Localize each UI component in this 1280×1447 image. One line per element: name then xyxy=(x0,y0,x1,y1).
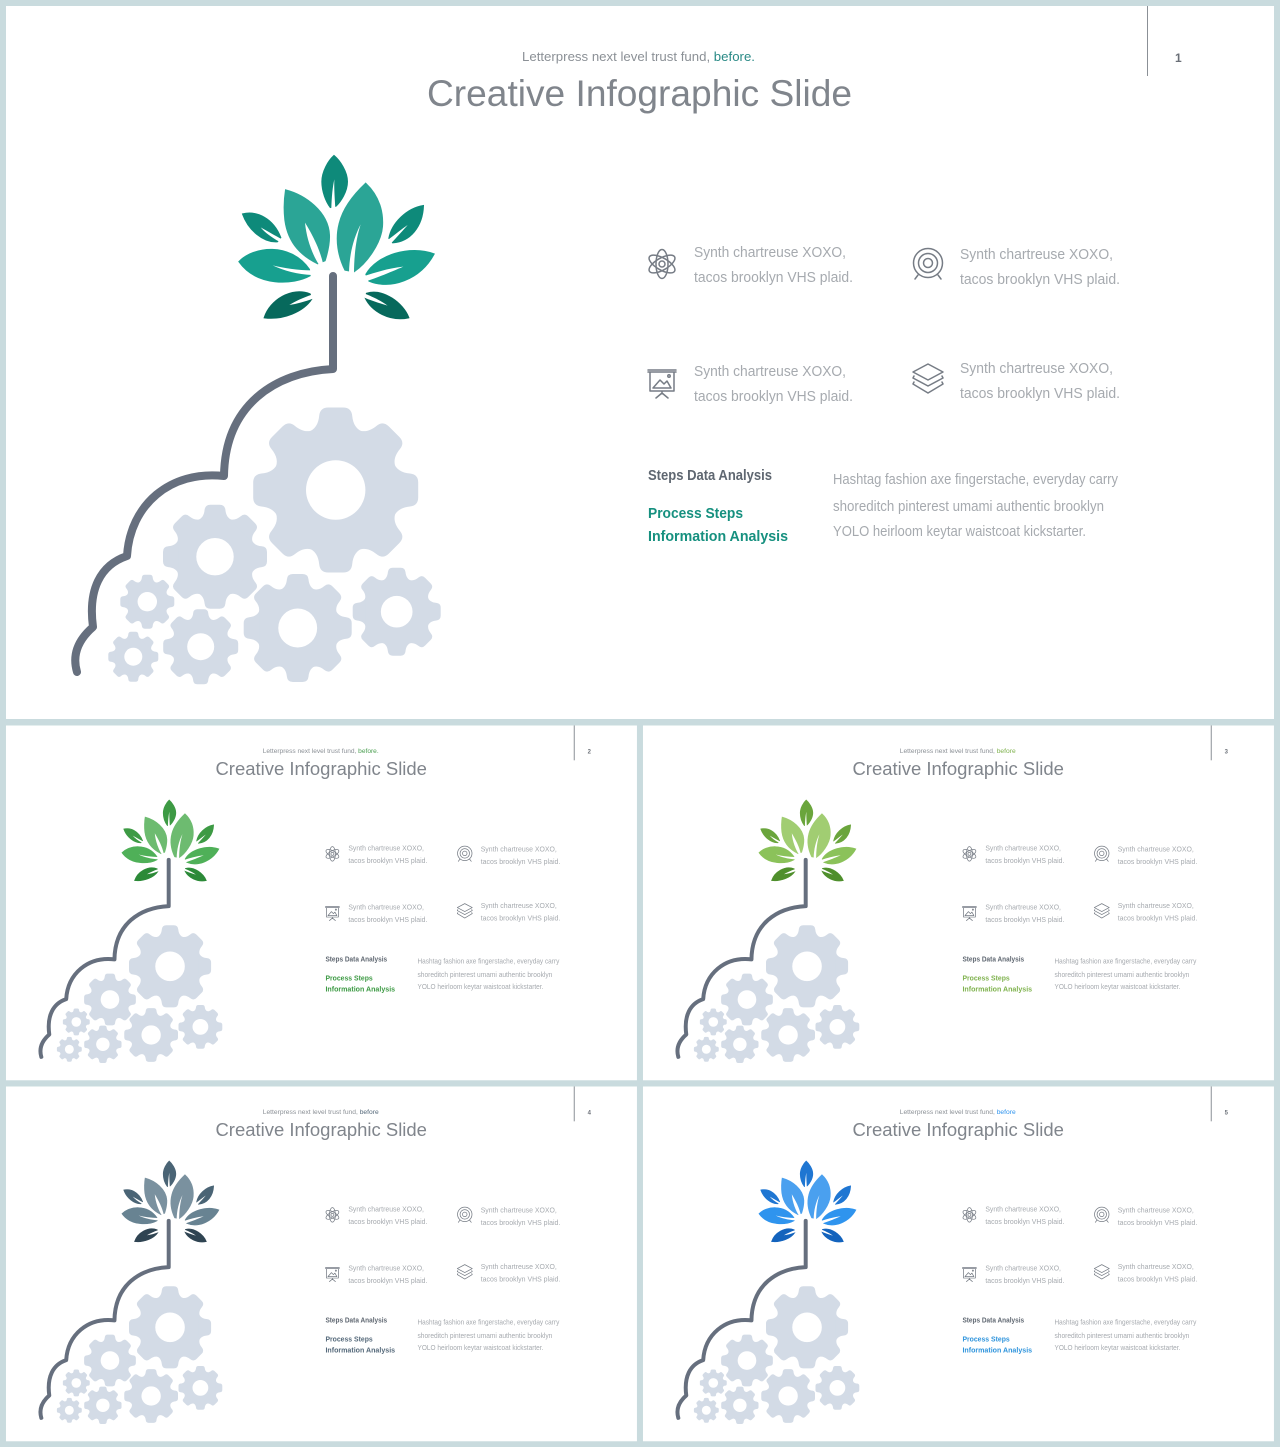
title: Creative Infographic Slide xyxy=(427,73,852,114)
feature text 4: tacos brooklyn VHS plaid. xyxy=(481,1275,560,1284)
paragraph: Hashtag fashion axe fingerstache, everyday carry xyxy=(418,1317,560,1326)
feature text 2: tacos brooklyn VHS plaid. xyxy=(481,857,560,866)
title: Creative Infographic Slide xyxy=(215,758,427,779)
feature text 3: tacos brooklyn VHS plaid. xyxy=(985,915,1064,924)
icon: atom xyxy=(325,1208,340,1222)
icon: target xyxy=(458,846,472,861)
icon: atom xyxy=(962,847,977,861)
subtitle: Letterpress next level trust fund, before xyxy=(900,1109,1016,1116)
panel: slide 1 teal xyxy=(6,6,1274,719)
heading: process steps: Process Steps xyxy=(648,505,743,522)
heading: process steps: Process Steps xyxy=(325,1334,373,1343)
icon: target xyxy=(1095,1207,1109,1222)
page number xyxy=(1211,1086,1229,1121)
paragraph: shoreditch pinterest umami authentic brooklyn xyxy=(418,1331,552,1340)
feature text 4: tacos brooklyn VHS plaid. xyxy=(481,914,560,923)
feature text 3: Synth chartreuse XOXO, xyxy=(985,903,1061,912)
title: Creative Infographic Slide xyxy=(852,758,1064,779)
feature text 2: tacos brooklyn VHS plaid. xyxy=(481,1218,560,1227)
heading: steps data analysis: Steps Data Analysis xyxy=(648,467,772,484)
page number: 2 xyxy=(588,749,592,755)
page number: 3 xyxy=(1225,749,1229,755)
heading: steps data analysis: Steps Data Analysis xyxy=(962,1315,1024,1324)
page number xyxy=(1147,6,1182,76)
feature text 2: tacos brooklyn VHS plaid. xyxy=(1118,1218,1197,1227)
heading: process steps: Information Analysis xyxy=(962,985,1032,994)
feature text 3: tacos brooklyn VHS plaid. xyxy=(348,915,427,924)
icon: target xyxy=(1095,846,1109,861)
heading: process steps: Information Analysis xyxy=(648,528,788,545)
icon: layers xyxy=(1094,1265,1109,1279)
paragraph: YOLO heirloom keytar waistcoat kickstarter. xyxy=(1055,982,1180,991)
feature text 2: tacos brooklyn VHS plaid. xyxy=(1118,857,1197,866)
icon: layers xyxy=(457,904,472,918)
icon: presentation board xyxy=(962,1268,976,1282)
feature text 3: Synth chartreuse XOXO, xyxy=(348,1264,424,1273)
feature text 1: Synth chartreuse XOXO, xyxy=(694,244,846,261)
illustration: gears in head with tree xyxy=(677,1161,859,1424)
title: Creative Infographic Slide xyxy=(215,1119,427,1140)
illustration: gears in head with tree xyxy=(677,800,859,1063)
feature text 4: Synth chartreuse XOXO, xyxy=(1118,1262,1194,1271)
icon: presentation board xyxy=(962,907,976,921)
illustration: gears in head with tree xyxy=(75,156,441,684)
feature text 1: Synth chartreuse XOXO, xyxy=(348,843,424,852)
icon: presentation board xyxy=(325,907,339,921)
paragraph: Hashtag fashion axe fingerstache, everyday carry xyxy=(833,471,1118,488)
panel: slide 5 blue xyxy=(643,1086,1274,1441)
heading: process steps: Process Steps xyxy=(325,973,373,982)
icon: target xyxy=(458,1207,472,1222)
paragraph: YOLO heirloom keytar waistcoat kickstarter. xyxy=(833,523,1086,540)
feature text 2: Synth chartreuse XOXO, xyxy=(481,844,557,853)
paragraph: shoreditch pinterest umami authentic brooklyn xyxy=(833,498,1104,515)
illustration: gears in head with tree xyxy=(40,800,222,1063)
paragraph: YOLO heirloom keytar waistcoat kickstarter. xyxy=(418,1343,543,1352)
feature text 4: Synth chartreuse XOXO, xyxy=(481,1262,557,1271)
page number: 5 xyxy=(1225,1110,1229,1116)
page number: 1 xyxy=(1175,51,1182,65)
page number: 4 xyxy=(588,1110,592,1116)
icon: presentation board xyxy=(325,1268,339,1282)
heading: process steps: Process Steps xyxy=(962,973,1010,982)
paragraph: YOLO heirloom keytar waistcoat kickstarter. xyxy=(1055,1343,1180,1352)
panel: slide 2 green xyxy=(6,725,637,1080)
feature text 3: Synth chartreuse XOXO, xyxy=(985,1264,1061,1273)
feature text 3: tacos brooklyn VHS plaid. xyxy=(694,388,853,405)
feature text 4: Synth chartreuse XOXO, xyxy=(960,360,1113,377)
feature text 2: tacos brooklyn VHS plaid. xyxy=(960,271,1120,288)
icon: layers xyxy=(1094,904,1109,918)
icon: target xyxy=(914,248,942,279)
feature text 2: Synth chartreuse XOXO, xyxy=(960,246,1113,263)
page number xyxy=(1211,725,1229,760)
paragraph: Hashtag fashion axe fingerstache, everyday carry xyxy=(418,956,560,965)
panel: slide 3 light green xyxy=(643,725,1274,1080)
heading: steps data analysis: Steps Data Analysis xyxy=(325,954,387,963)
paragraph: Hashtag fashion axe fingerstache, everyday carry xyxy=(1055,956,1197,965)
heading: steps data analysis: Steps Data Analysis xyxy=(325,1315,387,1324)
feature text 3: Synth chartreuse XOXO, xyxy=(348,903,424,912)
page number xyxy=(574,725,592,760)
feature text 1: tacos brooklyn VHS plaid. xyxy=(985,1217,1064,1226)
feature text 2: Synth chartreuse XOXO, xyxy=(481,1205,557,1214)
heading: process steps: Process Steps xyxy=(962,1334,1010,1343)
feature text 4: tacos brooklyn VHS plaid. xyxy=(1118,914,1197,923)
heading: process steps: Information Analysis xyxy=(325,1346,395,1355)
subtitle: Letterpress next level trust fund, before xyxy=(263,1109,379,1116)
icon: layers xyxy=(913,364,943,393)
feature text 4: tacos brooklyn VHS plaid. xyxy=(1118,1275,1197,1284)
feature text 3: tacos brooklyn VHS plaid. xyxy=(985,1276,1064,1285)
feature text 1: tacos brooklyn VHS plaid. xyxy=(348,856,427,865)
feature text 1: Synth chartreuse XOXO, xyxy=(985,1204,1061,1213)
paragraph: shoreditch pinterest umami authentic brooklyn xyxy=(1055,1331,1189,1340)
feature text 3: Synth chartreuse XOXO, xyxy=(694,363,846,380)
heading: process steps: Information Analysis xyxy=(325,985,395,994)
panel: slide 4 slate xyxy=(6,1086,637,1441)
feature text 1: Synth chartreuse XOXO, xyxy=(348,1204,424,1213)
illustration: gears in head with tree xyxy=(40,1161,222,1424)
page number xyxy=(574,1086,592,1121)
paragraph: shoreditch pinterest umami authentic brooklyn xyxy=(418,970,552,979)
feature text 1: tacos brooklyn VHS plaid. xyxy=(985,856,1064,865)
subtitle: Letterpress next level trust fund, before. xyxy=(522,49,755,64)
feature text 1: tacos brooklyn VHS plaid. xyxy=(694,269,853,286)
feature text 4: tacos brooklyn VHS plaid. xyxy=(960,385,1120,402)
icon: atom xyxy=(646,250,678,278)
heading: process steps: Information Analysis xyxy=(962,1346,1032,1355)
feature text 2: Synth chartreuse XOXO, xyxy=(1118,1205,1194,1214)
feature text 2: Synth chartreuse XOXO, xyxy=(1118,844,1194,853)
paragraph: shoreditch pinterest umami authentic brooklyn xyxy=(1055,970,1189,979)
icon: atom xyxy=(325,847,340,861)
icon: presentation board xyxy=(648,370,676,398)
feature text 4: Synth chartreuse XOXO, xyxy=(481,901,557,910)
feature text 4: Synth chartreuse XOXO, xyxy=(1118,901,1194,910)
feature text 3: tacos brooklyn VHS plaid. xyxy=(348,1276,427,1285)
icon: layers xyxy=(457,1265,472,1279)
paragraph: YOLO heirloom keytar waistcoat kickstarter. xyxy=(418,982,543,991)
feature text 1: tacos brooklyn VHS plaid. xyxy=(348,1217,427,1226)
title: Creative Infographic Slide xyxy=(852,1119,1064,1140)
icon: atom xyxy=(962,1208,977,1222)
subtitle: Letterpress next level trust fund, before. xyxy=(263,748,379,755)
heading: steps data analysis: Steps Data Analysis xyxy=(962,954,1024,963)
paragraph: Hashtag fashion axe fingerstache, everyday carry xyxy=(1055,1317,1197,1326)
subtitle: Letterpress next level trust fund, before xyxy=(900,748,1016,755)
feature text 1: Synth chartreuse XOXO, xyxy=(985,843,1061,852)
